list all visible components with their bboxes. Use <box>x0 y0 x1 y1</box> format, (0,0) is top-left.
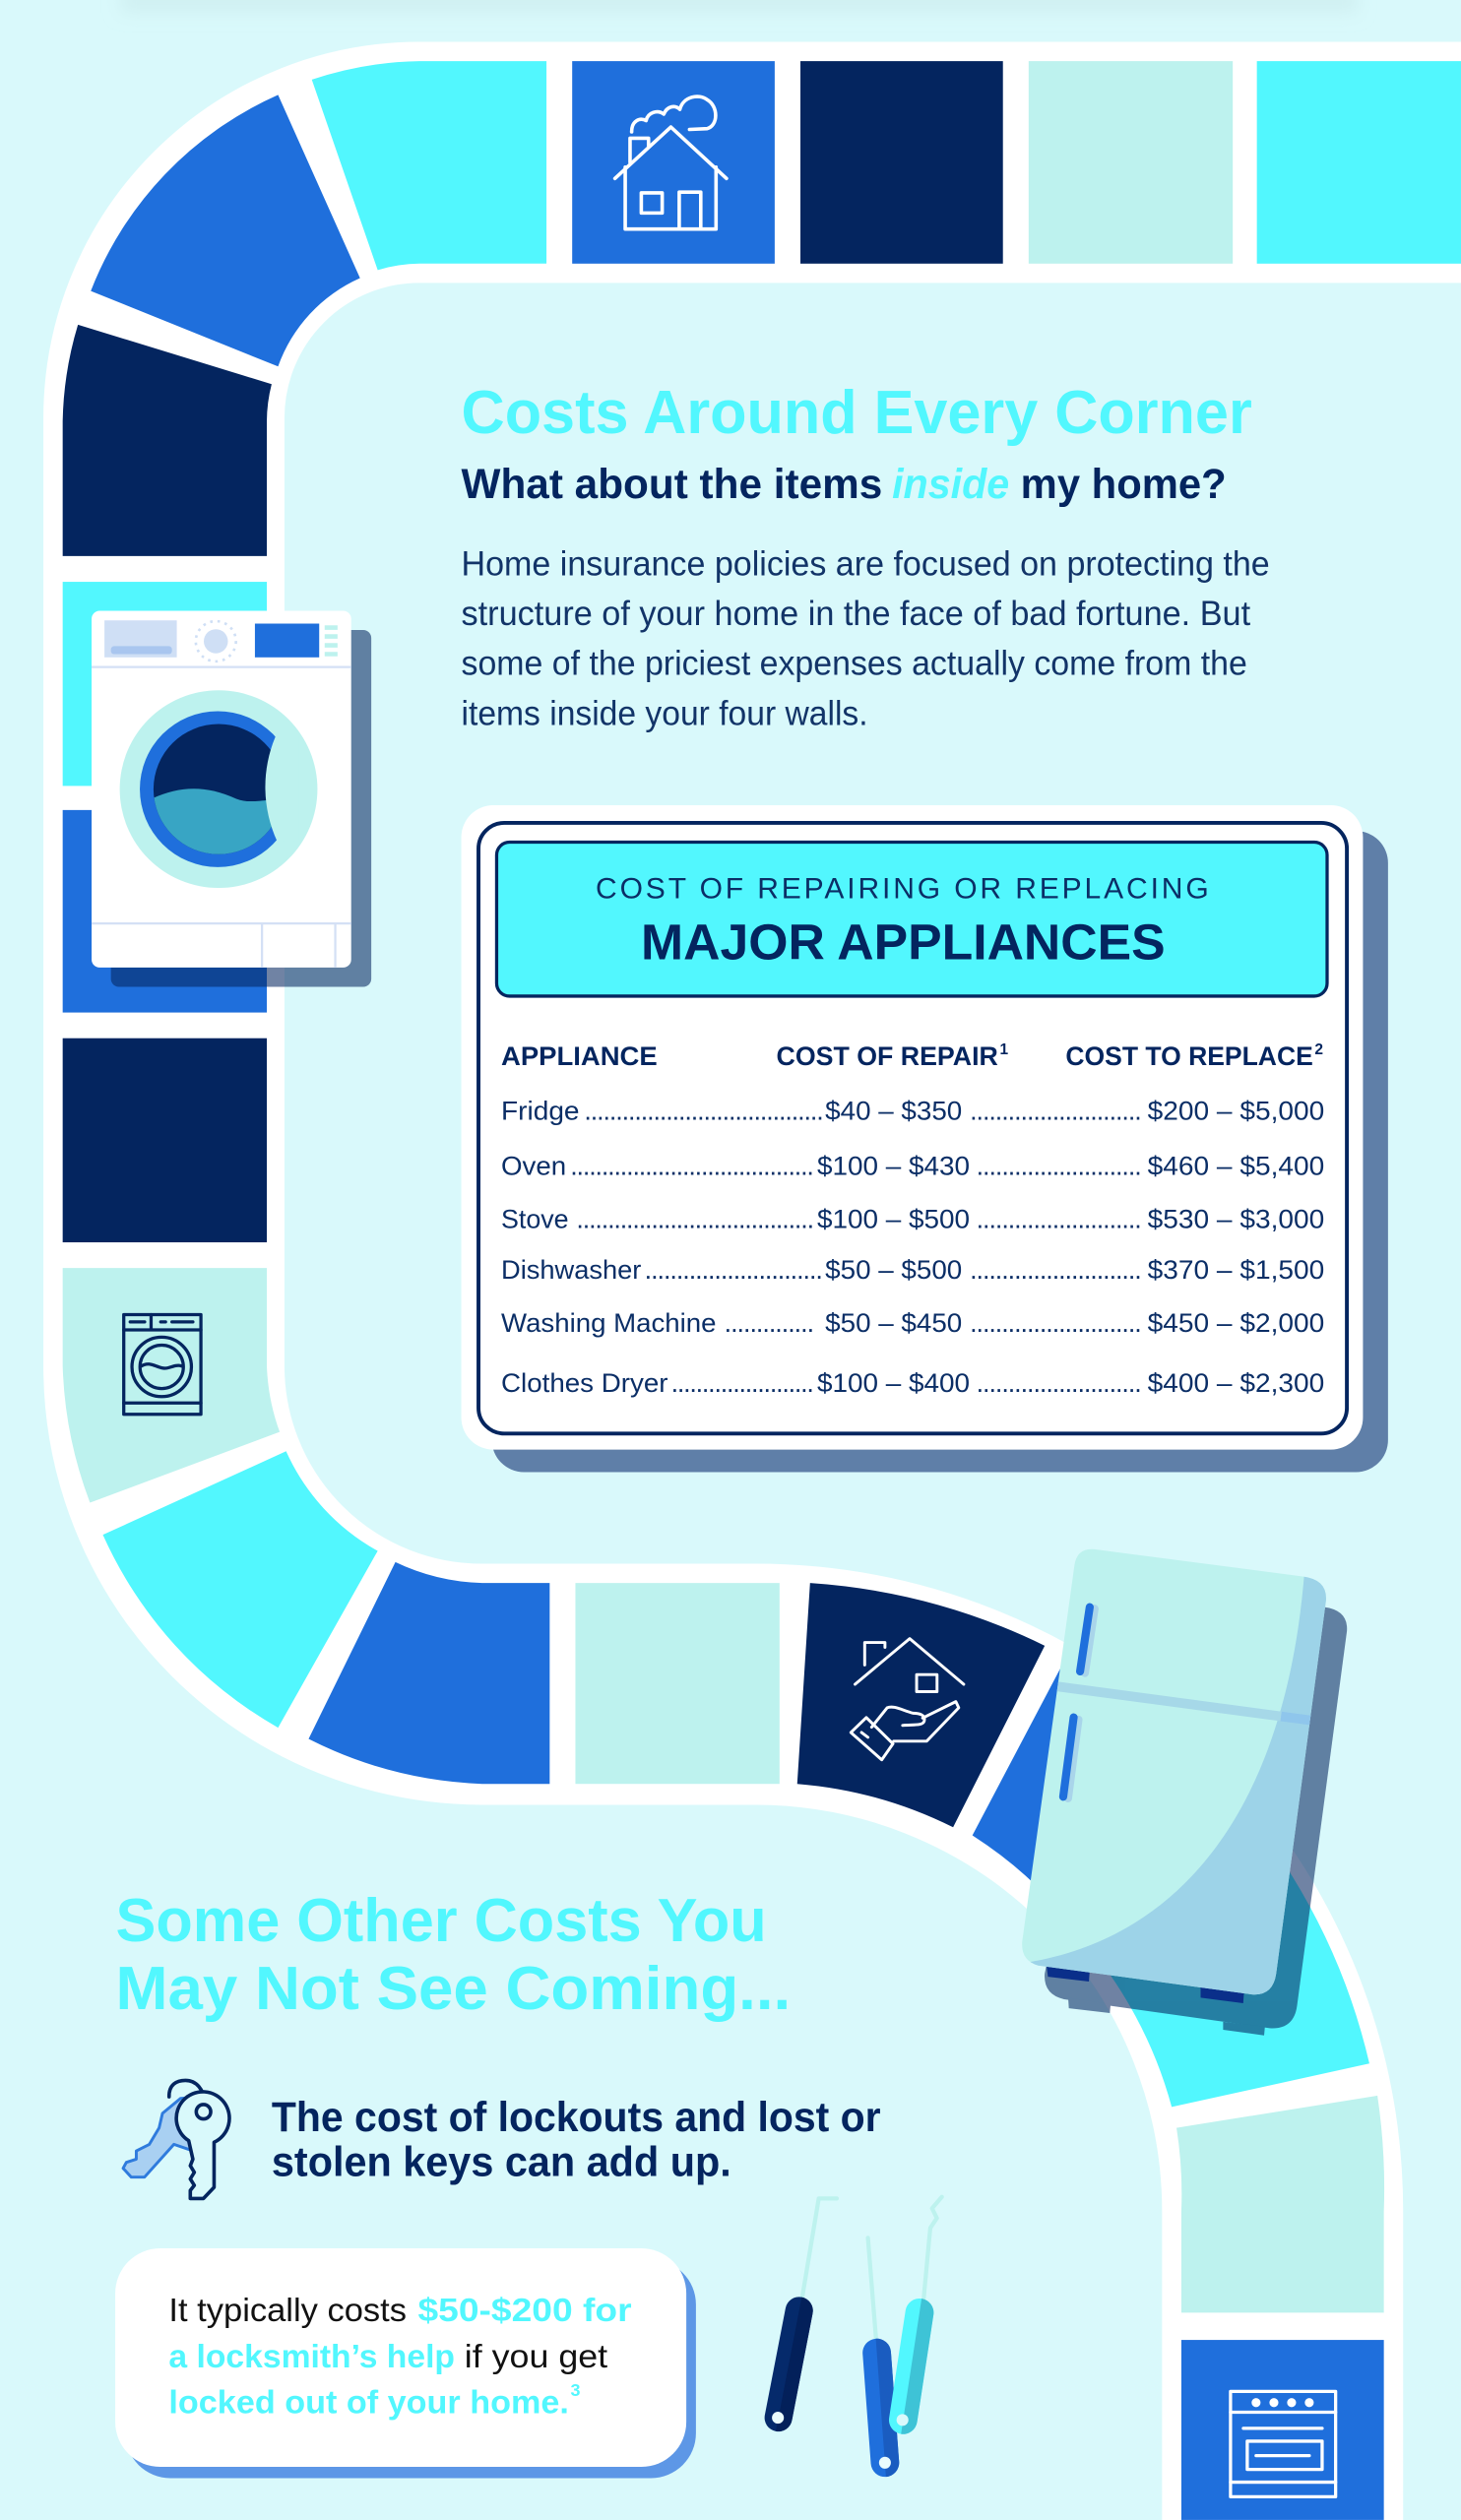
washer body <box>92 610 351 968</box>
subheading: items inside my home: What about the items <box>462 461 882 507</box>
callout text: a locksmith’s help <box>168 2339 455 2375</box>
callout text: $50-$200 for <box>417 2293 632 2329</box>
illustration: lock picks <box>772 2197 942 2477</box>
callout text: if you get <box>465 2339 608 2375</box>
row: clothes dryer: Clothes Dryer <box>501 1368 668 1398</box>
blue key <box>123 2098 196 2177</box>
icon: small washing machine <box>124 1315 201 1415</box>
illustration: refrigerator <box>1016 1549 1347 2036</box>
row: washing machine: $450 – $2,000 <box>1148 1308 1324 1338</box>
row: fridge: $40 – $350 <box>825 1096 962 1125</box>
row: dishwasher <box>501 1255 1324 1285</box>
row: oven <box>501 1151 1324 1180</box>
heading: lockouts and lost keys: The cost of lockouts and lost or <box>272 2094 881 2140</box>
row: oven: Oven <box>501 1151 566 1180</box>
heading: lockouts and lost keys <box>272 2094 881 2185</box>
row: stove: ...................................... <box>576 1204 814 1233</box>
row: fridge: Fridge <box>501 1096 580 1125</box>
row: clothes dryer <box>501 1368 1324 1398</box>
row: fridge: ...................................... <box>584 1096 824 1125</box>
column headers: 1 <box>999 1041 1008 1058</box>
body paragraph: Home insurance policies are focused on protecting the <box>462 545 1270 584</box>
callout text: 3 <box>571 2380 581 2400</box>
row: oven: ....................................... <box>570 1151 814 1180</box>
row: stove: $100 – $500 <box>817 1204 970 1233</box>
tile: cyan corner <box>312 61 546 270</box>
heading: lockouts and lost keys: stolen keys can add up. <box>272 2139 731 2185</box>
tile: left blue <box>63 810 267 1013</box>
tile: lower blue <box>308 1562 549 1784</box>
tile: top cyan far right <box>1257 61 1461 264</box>
row: oven: $100 – $430 <box>817 1151 970 1180</box>
tile: blue corner <box>91 94 360 366</box>
row: washing machine: ........................... <box>970 1308 1142 1338</box>
row: dishwasher: $370 – $1,500 <box>1148 1255 1324 1285</box>
tile: right teal <box>1176 2096 1384 2312</box>
fridge feet <box>1047 1964 1244 2003</box>
tile: lower teal <box>575 1583 780 1784</box>
panel: major appliances cost table <box>462 805 1388 1472</box>
tile: left navy <box>63 1039 267 1242</box>
tile: blue behind fridge <box>973 1656 1245 1921</box>
callout text: locked out of your home. <box>168 2385 569 2422</box>
column headers: APPLIANCE <box>501 1041 658 1071</box>
tile: lower cyan <box>102 1451 378 1728</box>
icon: keys <box>123 2080 229 2198</box>
row: stove: Stove <box>501 1204 569 1233</box>
subheading: items inside my home <box>462 461 1227 507</box>
tile: left teal <box>63 1268 280 1503</box>
tile: left cyan <box>63 582 267 786</box>
row: clothes dryer: $400 – $2,300 <box>1148 1368 1324 1398</box>
tile: top navy <box>800 61 1003 264</box>
heading: some other costs <box>116 1887 791 2023</box>
body paragraph <box>462 545 1270 732</box>
subheading: items inside my home: my home? <box>1021 461 1227 507</box>
icon: oven <box>1231 2391 1336 2496</box>
tile: navy corner <box>63 325 272 556</box>
icon: house with chimney smoke <box>615 96 727 229</box>
column headers: COST TO REPLACE <box>1065 1041 1313 1071</box>
row: stove: $530 – $3,000 <box>1148 1204 1324 1233</box>
row: dishwasher: $50 – $500 <box>825 1255 962 1285</box>
table shadow <box>492 831 1388 1472</box>
column headers: COST OF REPAIR <box>777 1041 998 1071</box>
washer control panel <box>92 620 351 968</box>
row: clothes dryer: ....................... <box>671 1368 814 1398</box>
row: dishwasher: ........................... <box>970 1255 1142 1285</box>
tile: right blue with oven icon <box>1181 2340 1384 2520</box>
row: clothes dryer: .......................... <box>977 1368 1142 1398</box>
callout card <box>115 2248 686 2467</box>
column headers <box>501 1041 1323 1071</box>
heading: some other costs: Some Other Costs You <box>116 1887 767 1955</box>
callout shadow <box>125 2259 696 2478</box>
washer shadow <box>111 630 371 986</box>
table header banner: COST OF REPAIRING OR REPLACING <box>596 873 1209 906</box>
row: dishwasher: Dishwasher <box>501 1255 641 1285</box>
heading: some other costs: May Not See Coming... <box>116 1955 791 2023</box>
pick wires <box>802 2197 942 2340</box>
blue lock pick <box>876 2339 899 2477</box>
table card <box>462 805 1363 1450</box>
callout text <box>168 2293 632 2422</box>
body paragraph: structure of your home in the face of bad fortune. But <box>462 595 1250 633</box>
tile: cyan below fridge <box>1080 1857 1369 2107</box>
row: stove: .......................... <box>977 1204 1142 1233</box>
tile: top blue with house icon <box>572 61 775 264</box>
table header banner: MAJOR APPLIANCES <box>641 914 1166 971</box>
fridge body <box>1022 1549 1326 1994</box>
tile: top teal <box>1029 61 1233 264</box>
callout: locksmith cost <box>115 2248 696 2478</box>
table border <box>478 823 1347 1433</box>
row: fridge <box>501 1096 1324 1125</box>
row: oven: $460 – $5,400 <box>1148 1151 1324 1180</box>
row: washing machine <box>501 1308 1324 1338</box>
row: dishwasher: ............................ <box>645 1255 823 1285</box>
fridge shading <box>1030 1577 1326 1994</box>
subheading: items inside my home: inside <box>892 461 1009 507</box>
row: washing machine: $50 – $450 <box>825 1308 962 1338</box>
illustration: front-loading washer <box>92 610 371 986</box>
body paragraph: items inside your four walls. <box>462 694 868 732</box>
fridge handles <box>1063 1607 1095 1798</box>
navy lock pick <box>772 2298 813 2431</box>
title: costs around every corner: Costs Around Every Corner <box>462 379 1252 447</box>
table header banner <box>496 843 1327 996</box>
body paragraph: some of the priciest expenses actually come from the <box>462 645 1247 683</box>
row: oven: .......................... <box>977 1151 1142 1180</box>
row: fridge: $200 – $5,000 <box>1148 1096 1324 1125</box>
row: fridge: ........................... <box>970 1096 1142 1125</box>
column headers: 2 <box>1314 1041 1323 1058</box>
row: stove <box>501 1204 1324 1233</box>
row: clothes dryer: $100 – $400 <box>817 1368 970 1398</box>
cyan lock pick <box>897 2299 933 2434</box>
callout text: It typically costs <box>168 2293 407 2329</box>
navy key <box>169 2080 229 2198</box>
fridge shadow <box>1045 1583 1347 2036</box>
washer door <box>120 690 317 888</box>
icon: hand holding house <box>851 1639 964 1760</box>
row: washing machine: .............. <box>725 1308 814 1338</box>
tile: lower navy <box>797 1583 1045 1827</box>
row: washing machine: Washing Machine <box>501 1308 716 1338</box>
